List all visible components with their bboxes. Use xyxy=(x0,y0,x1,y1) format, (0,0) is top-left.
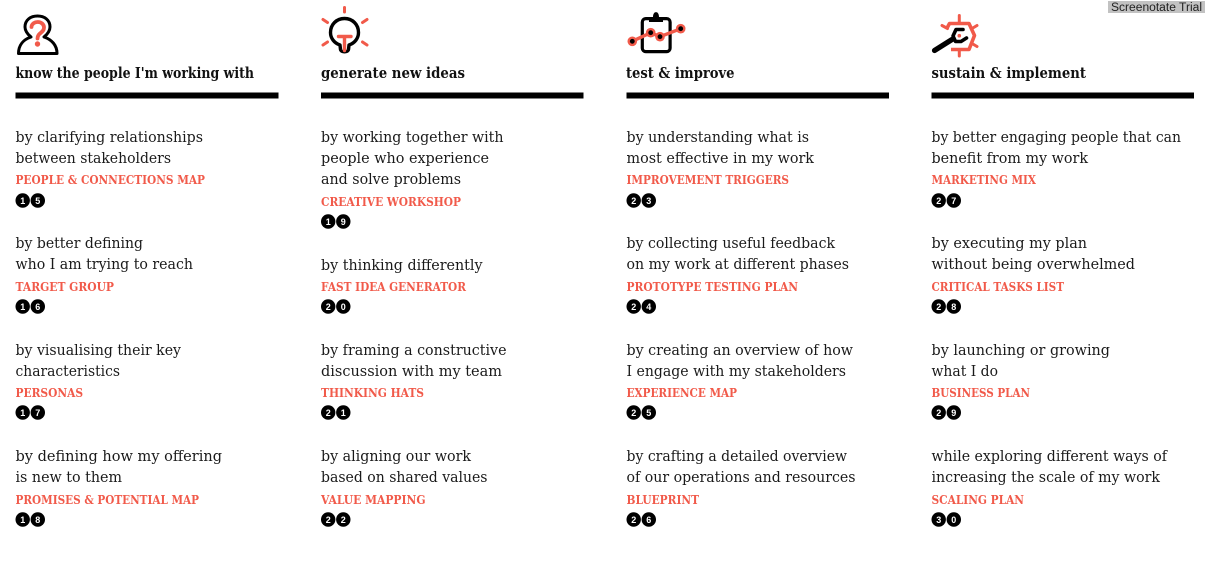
item: people and connections map: PEOPLE & CONNECTIONS MAP xyxy=(16,172,206,187)
item: personas: 7 xyxy=(35,408,40,418)
item: promises and potential map: 1 xyxy=(20,515,25,525)
item: experience map: 5 xyxy=(646,408,651,418)
item: fast idea generator: by thinking differently xyxy=(321,258,483,274)
item: target group: 6 xyxy=(35,302,40,312)
item: people and connections map: between stakeholders xyxy=(16,151,171,167)
item: personas: 1 xyxy=(20,408,25,418)
heading rule xyxy=(626,92,889,98)
item: promises and potential map xyxy=(16,449,222,527)
item: improvement triggers: 2 xyxy=(631,196,636,206)
item: critical tasks list: without being overwhelmed xyxy=(932,257,1135,273)
icon: gear with wrench xyxy=(934,16,977,56)
item: blueprint: by crafting a detailed overview xyxy=(626,449,848,465)
item: marketing mix: 2 xyxy=(936,196,941,206)
panel: know the people xyxy=(16,16,278,527)
item: critical tasks list: by executing my plan xyxy=(932,236,1087,252)
item: value mapping xyxy=(320,449,488,527)
item: scaling plan: 3 xyxy=(936,515,941,525)
heading: sustain & implement xyxy=(932,64,1086,82)
item: business plan: 9 xyxy=(951,408,956,418)
item: business plan: 2 xyxy=(936,408,941,418)
item: thinking hats xyxy=(321,343,506,420)
item: target group: 1 xyxy=(20,302,25,312)
item: value mapping: VALUE MAPPING xyxy=(320,492,426,507)
item: blueprint: 2 xyxy=(631,515,636,525)
item: experience map: I engage with my stakeholders xyxy=(626,364,846,380)
item: improvement triggers xyxy=(626,130,814,208)
item: creative workshop: 9 xyxy=(341,217,346,227)
item: marketing mix: 7 xyxy=(951,196,956,206)
item: scaling plan: SCALING PLAN xyxy=(932,492,1024,507)
item: value mapping: 2 xyxy=(341,515,346,525)
item: personas: characteristics xyxy=(16,364,120,380)
item: fast idea generator: FAST IDEA GENERATOR xyxy=(321,279,467,294)
item: business plan: what I do xyxy=(932,364,998,380)
item: promises and potential map: by defining how my offering xyxy=(16,449,222,465)
item: people and connections map: 1 xyxy=(20,196,25,206)
item: critical tasks list: CRITICAL TASKS LIST xyxy=(932,279,1065,294)
item: prototype testing plan: PROTOTYPE TESTING PLAN xyxy=(626,279,798,294)
panel: generate new ideas xyxy=(320,8,584,527)
item: creative workshop: 1 xyxy=(326,217,331,227)
item: value mapping: 2 xyxy=(326,515,331,525)
item: prototype testing plan: 2 xyxy=(631,302,636,312)
item: blueprint: 6 xyxy=(646,515,651,525)
item: people and connections map: 5 xyxy=(35,196,40,206)
item: prototype testing plan: by collecting useful feedback xyxy=(626,236,835,252)
item: blueprint: of our operations and resources xyxy=(626,470,856,486)
item: improvement triggers: by understanding what is xyxy=(626,130,809,146)
item: thinking hats: 1 xyxy=(341,408,346,418)
item: critical tasks list: 8 xyxy=(951,302,956,312)
icon: light bulb xyxy=(323,8,367,52)
item: value mapping: based on shared values xyxy=(321,470,488,486)
item: experience map: by creating an overview of how xyxy=(626,343,854,359)
heading rule xyxy=(932,92,1194,98)
item: experience map xyxy=(626,343,854,420)
item: business plan: BUSINESS PLAN xyxy=(932,385,1030,400)
item: people and connections map xyxy=(16,130,206,208)
item: scaling plan: increasing the scale of my work xyxy=(932,470,1160,486)
item: improvement triggers: most effective in my work xyxy=(626,151,814,167)
item: marketing mix xyxy=(932,130,1181,208)
item: people and connections map: by clarifying relationships xyxy=(16,130,203,146)
item: thinking hats: 2 xyxy=(326,408,331,418)
item: critical tasks list: 2 xyxy=(936,302,941,312)
item: thinking hats: discussion with my team xyxy=(321,364,502,380)
item: blueprint: BLUEPRINT xyxy=(626,492,700,507)
trial watermark: Screenotate Trial xyxy=(1111,2,1202,14)
item: fast idea generator xyxy=(321,258,483,314)
item: blueprint xyxy=(626,449,856,527)
item: target group: who I am trying to reach xyxy=(16,257,193,273)
item: marketing mix: by better engaging people that can xyxy=(932,130,1181,146)
item: personas: PERSONAS xyxy=(16,385,83,400)
item: creative workshop: CREATIVE WORKSHOP xyxy=(321,194,462,209)
item: business plan: by launching or growing xyxy=(932,343,1110,359)
item: promises and potential map: 8 xyxy=(35,515,40,525)
item: improvement triggers: 3 xyxy=(646,196,651,206)
item: target group: TARGET GROUP xyxy=(16,279,115,294)
item: thinking hats: by framing a constructive xyxy=(321,343,506,359)
icon: person with question mark xyxy=(18,16,57,54)
item: prototype testing plan: on my work at different phases xyxy=(626,257,849,273)
icon: clipboard with line chart xyxy=(628,12,686,52)
item: target group: by better defining xyxy=(16,236,143,252)
item: prototype testing plan xyxy=(626,236,849,314)
panel: test and improve xyxy=(626,12,889,527)
item: creative workshop: and solve problems xyxy=(321,172,461,188)
panel: sustain and implement xyxy=(932,16,1194,527)
item: fast idea generator: 0 xyxy=(341,302,346,312)
heading rule xyxy=(16,92,278,98)
item: fast idea generator: 2 xyxy=(326,302,331,312)
item: promises and potential map: is new to them xyxy=(16,470,122,486)
heading: generate new ideas xyxy=(321,64,465,82)
item: scaling plan: while exploring different ways of xyxy=(932,449,1169,465)
item: improvement triggers: IMPROVEMENT TRIGGERS xyxy=(626,172,789,187)
item: creative workshop: by working together with xyxy=(321,130,504,146)
heading: test & improve xyxy=(626,64,734,82)
item: experience map: EXPERIENCE MAP xyxy=(626,385,737,400)
item: critical tasks list xyxy=(932,236,1135,314)
item: prototype testing plan: 4 xyxy=(646,302,651,312)
item: creative workshop xyxy=(321,130,504,229)
item: business plan xyxy=(932,343,1110,420)
heading: know the people I'm working with xyxy=(16,64,254,82)
item: value mapping: by aligning our work xyxy=(321,449,471,465)
item: promises and potential map: PROMISES & POTENTIAL MAP xyxy=(16,492,199,507)
item: thinking hats: THINKING HATS xyxy=(321,385,424,400)
heading rule xyxy=(321,92,584,98)
item: experience map: 2 xyxy=(631,408,636,418)
item: scaling plan: 0 xyxy=(951,515,956,525)
item: personas: by visualising their key xyxy=(16,343,182,359)
item: personas xyxy=(16,343,182,420)
item: marketing mix: MARKETING MIX xyxy=(932,172,1036,187)
item: marketing mix: benefit from my work xyxy=(932,151,1088,167)
item: target group xyxy=(16,236,193,314)
item: creative workshop: people who experience xyxy=(321,151,489,167)
item: scaling plan xyxy=(932,449,1169,527)
